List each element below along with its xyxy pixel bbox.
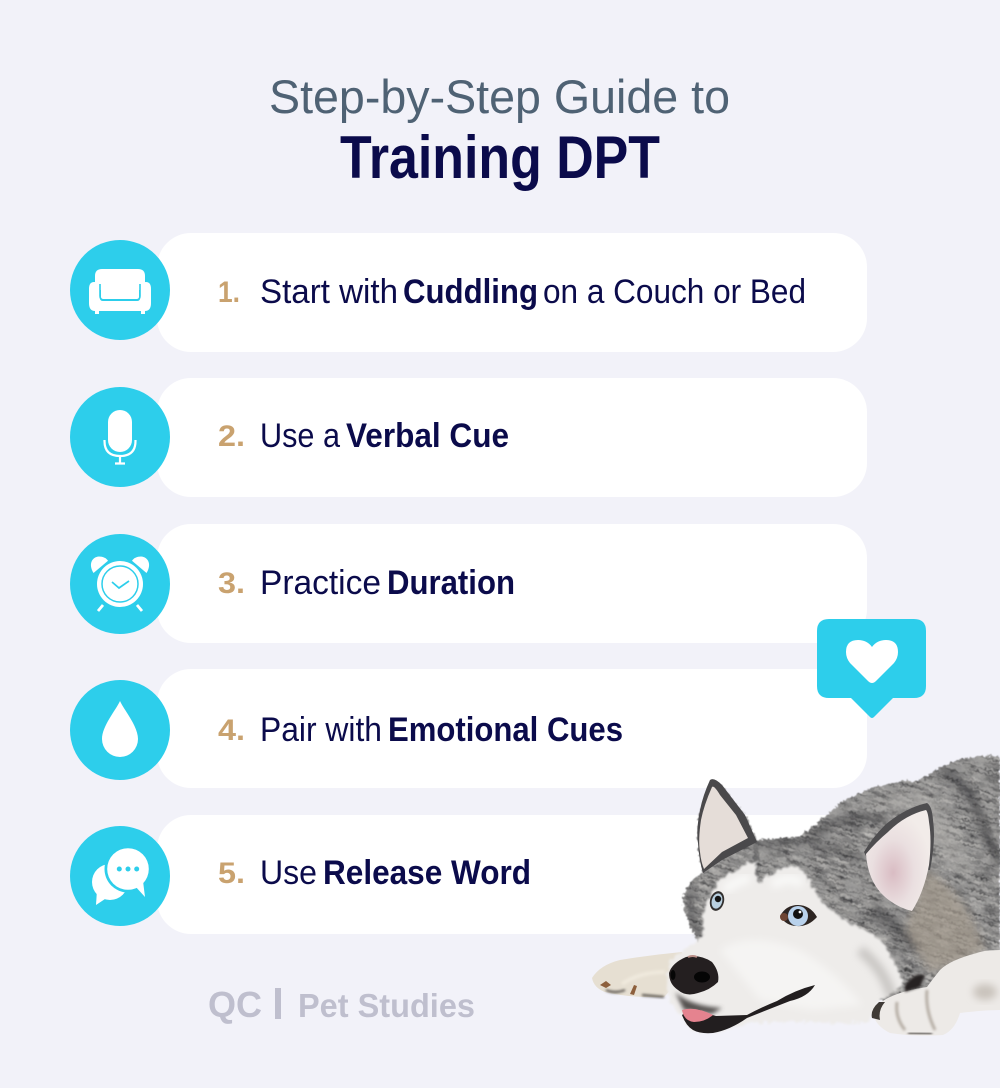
dog tongue: [682, 1009, 713, 1022]
step 5 text: [218, 854, 531, 892]
dog left ear: [697, 779, 757, 873]
logo: QC Pet Studies: Pet Studies: [298, 987, 475, 1024]
step 3 card: [157, 524, 867, 643]
title: Training DPT: [340, 124, 660, 191]
logo: QC Pet Studies: [208, 984, 475, 1025]
step 3 text: [218, 564, 515, 602]
step 5 text: Release Word: [323, 854, 531, 892]
logo: QC Pet Studies: QC: [208, 984, 262, 1025]
step 1 text: Start with: [260, 273, 398, 311]
step 2 text: [218, 417, 509, 455]
title: [269, 70, 730, 191]
icon: couch: [70, 240, 170, 340]
dog right eye: [780, 905, 817, 926]
step 2 text: Verbal Cue: [346, 417, 509, 455]
step 1 text: 1.: [218, 276, 240, 309]
dog open mouth: [682, 985, 815, 1033]
dog near leg and paw: [872, 950, 1000, 1036]
dog white face: [667, 860, 903, 1033]
icon: chat bubbles: [70, 826, 170, 926]
step 2: [70, 378, 867, 497]
dog right ear: [860, 803, 934, 911]
step 3 text: Practice: [260, 564, 381, 602]
icon: water drop: [70, 680, 170, 780]
step 3 text: 3.: [218, 567, 245, 600]
step 3: [70, 524, 867, 643]
step 5 text: Use: [260, 854, 317, 892]
step 5 card: [157, 815, 867, 934]
step 1 text: [218, 273, 806, 311]
dog body and head fur: [681, 754, 1000, 1001]
dog nose: [669, 956, 718, 994]
step 4 card: [157, 669, 867, 788]
icon: alarm clock: [70, 534, 170, 634]
step 2 text: Use a: [260, 417, 340, 455]
icon: microphone: [70, 387, 170, 487]
dog lighter tan fur: [905, 870, 985, 972]
step 1: [70, 233, 867, 352]
step 2 text: 2.: [218, 420, 245, 453]
step 4 text: Pair with: [260, 711, 382, 749]
step 4 text: [218, 711, 623, 749]
dog left eye: [708, 890, 726, 912]
step 3 text: Duration: [387, 564, 515, 602]
step 1 card: [157, 233, 867, 352]
dog far paw: [592, 952, 690, 997]
title: Step-by-Step Guide to: [269, 70, 730, 123]
step 4 text: Emotional Cues: [388, 711, 623, 749]
step 5: [70, 815, 867, 934]
dog dark fur bands: [690, 772, 998, 945]
husky dog illustration: [592, 754, 1000, 1036]
step 2 card: [157, 378, 867, 497]
step 1 text: Cuddling: [403, 273, 538, 311]
step 1 text: on a Couch or Bed: [543, 273, 806, 311]
icon: heart speech bubble: [817, 619, 926, 718]
step 5 text: 5.: [218, 857, 245, 890]
step 4 text: 4.: [218, 714, 245, 747]
step 4: [70, 669, 867, 788]
